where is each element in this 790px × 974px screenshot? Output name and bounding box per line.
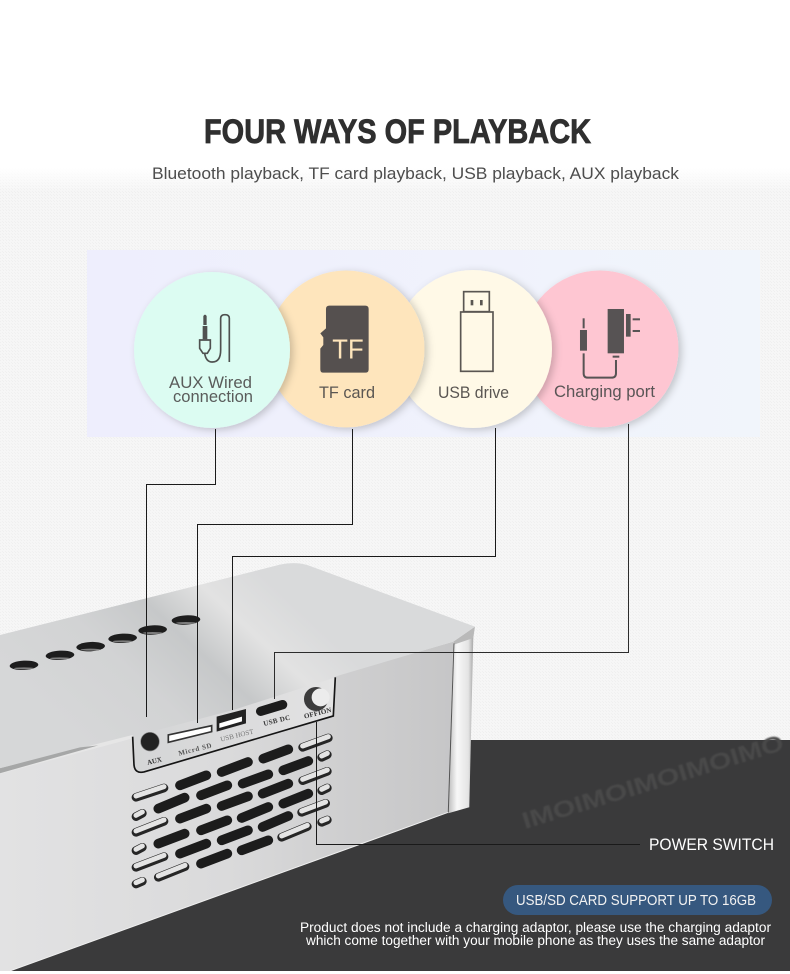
- label: AUX wired connection: AUX Wired: [169, 374, 252, 392]
- circle: USB drive: [394, 270, 552, 428]
- speaker grille: light slots: [136, 738, 328, 884]
- port labels: USB HOST: [220, 727, 255, 744]
- top buttons: [9, 615, 201, 671]
- label: power switch: POWER SWITCH: [649, 835, 774, 854]
- port labels: OFFION: [303, 706, 332, 721]
- port: USB host: [217, 709, 246, 732]
- icon: charger: [580, 309, 640, 378]
- note text: [300, 920, 772, 948]
- badge: card support: USB/SD CARD SUPPORT UP TO 16GB: [516, 893, 756, 909]
- edge highlight: [0, 735, 133, 774]
- panel: connection options: [87, 250, 760, 437]
- port labels: AUX: [146, 755, 163, 767]
- ports panel outline: [133, 677, 335, 772]
- label: TF card: TF card: [319, 383, 375, 402]
- connector lines: [146, 424, 640, 844]
- note text: which come together with your mobile phone as they uses the same adaptor: [305, 933, 765, 948]
- label: charging port: Charging port: [554, 383, 655, 401]
- icon: TF card: TF: [332, 333, 364, 364]
- port labels: USB DC: [263, 714, 291, 728]
- speaker right side: [448, 627, 475, 813]
- circle: TF card: [268, 270, 424, 428]
- icon: USB stick: [461, 292, 493, 371]
- circle: AUX: [134, 272, 290, 428]
- power button: [304, 687, 330, 711]
- badge: card support: [503, 885, 772, 915]
- circle: charging port: [522, 270, 678, 428]
- subtitle: Bluetooth playback, TF card playback, USB playback, AUX playback: [152, 164, 679, 183]
- speaker top face: [0, 563, 475, 772]
- speaker grille: dark slots: [158, 749, 308, 864]
- port labels: [146, 706, 332, 767]
- note text: Product does not include a charging adaptor, please use the charging adaptor: [300, 920, 772, 935]
- line: charging port: [274, 424, 628, 699]
- line: USB drive: [232, 428, 496, 710]
- label: USB drive: USB drive: [438, 383, 509, 402]
- title: FOUR WAYS OF PLAYBACK: [204, 113, 591, 151]
- circle: AUX: connection: [173, 388, 253, 406]
- port labels: Micrd SD: [178, 742, 212, 758]
- port: AUX jack: [141, 732, 159, 751]
- icon: TF card: [320, 306, 369, 373]
- line: power switch: [316, 722, 640, 844]
- grille slot highlights: [136, 737, 328, 883]
- port: micro SD: [168, 726, 212, 742]
- port: USB DC: [261, 705, 283, 711]
- icon: audio jack: [200, 315, 229, 362]
- line: AUX: [146, 429, 216, 717]
- speaker front face: [0, 642, 453, 971]
- port recess: [133, 677, 335, 772]
- speaker illustration: [0, 563, 475, 971]
- line: TF card: [198, 429, 352, 723]
- watermark: IMOIMOIMOIMOIMO: [519, 729, 787, 834]
- dark floor panel: [0, 740, 790, 971]
